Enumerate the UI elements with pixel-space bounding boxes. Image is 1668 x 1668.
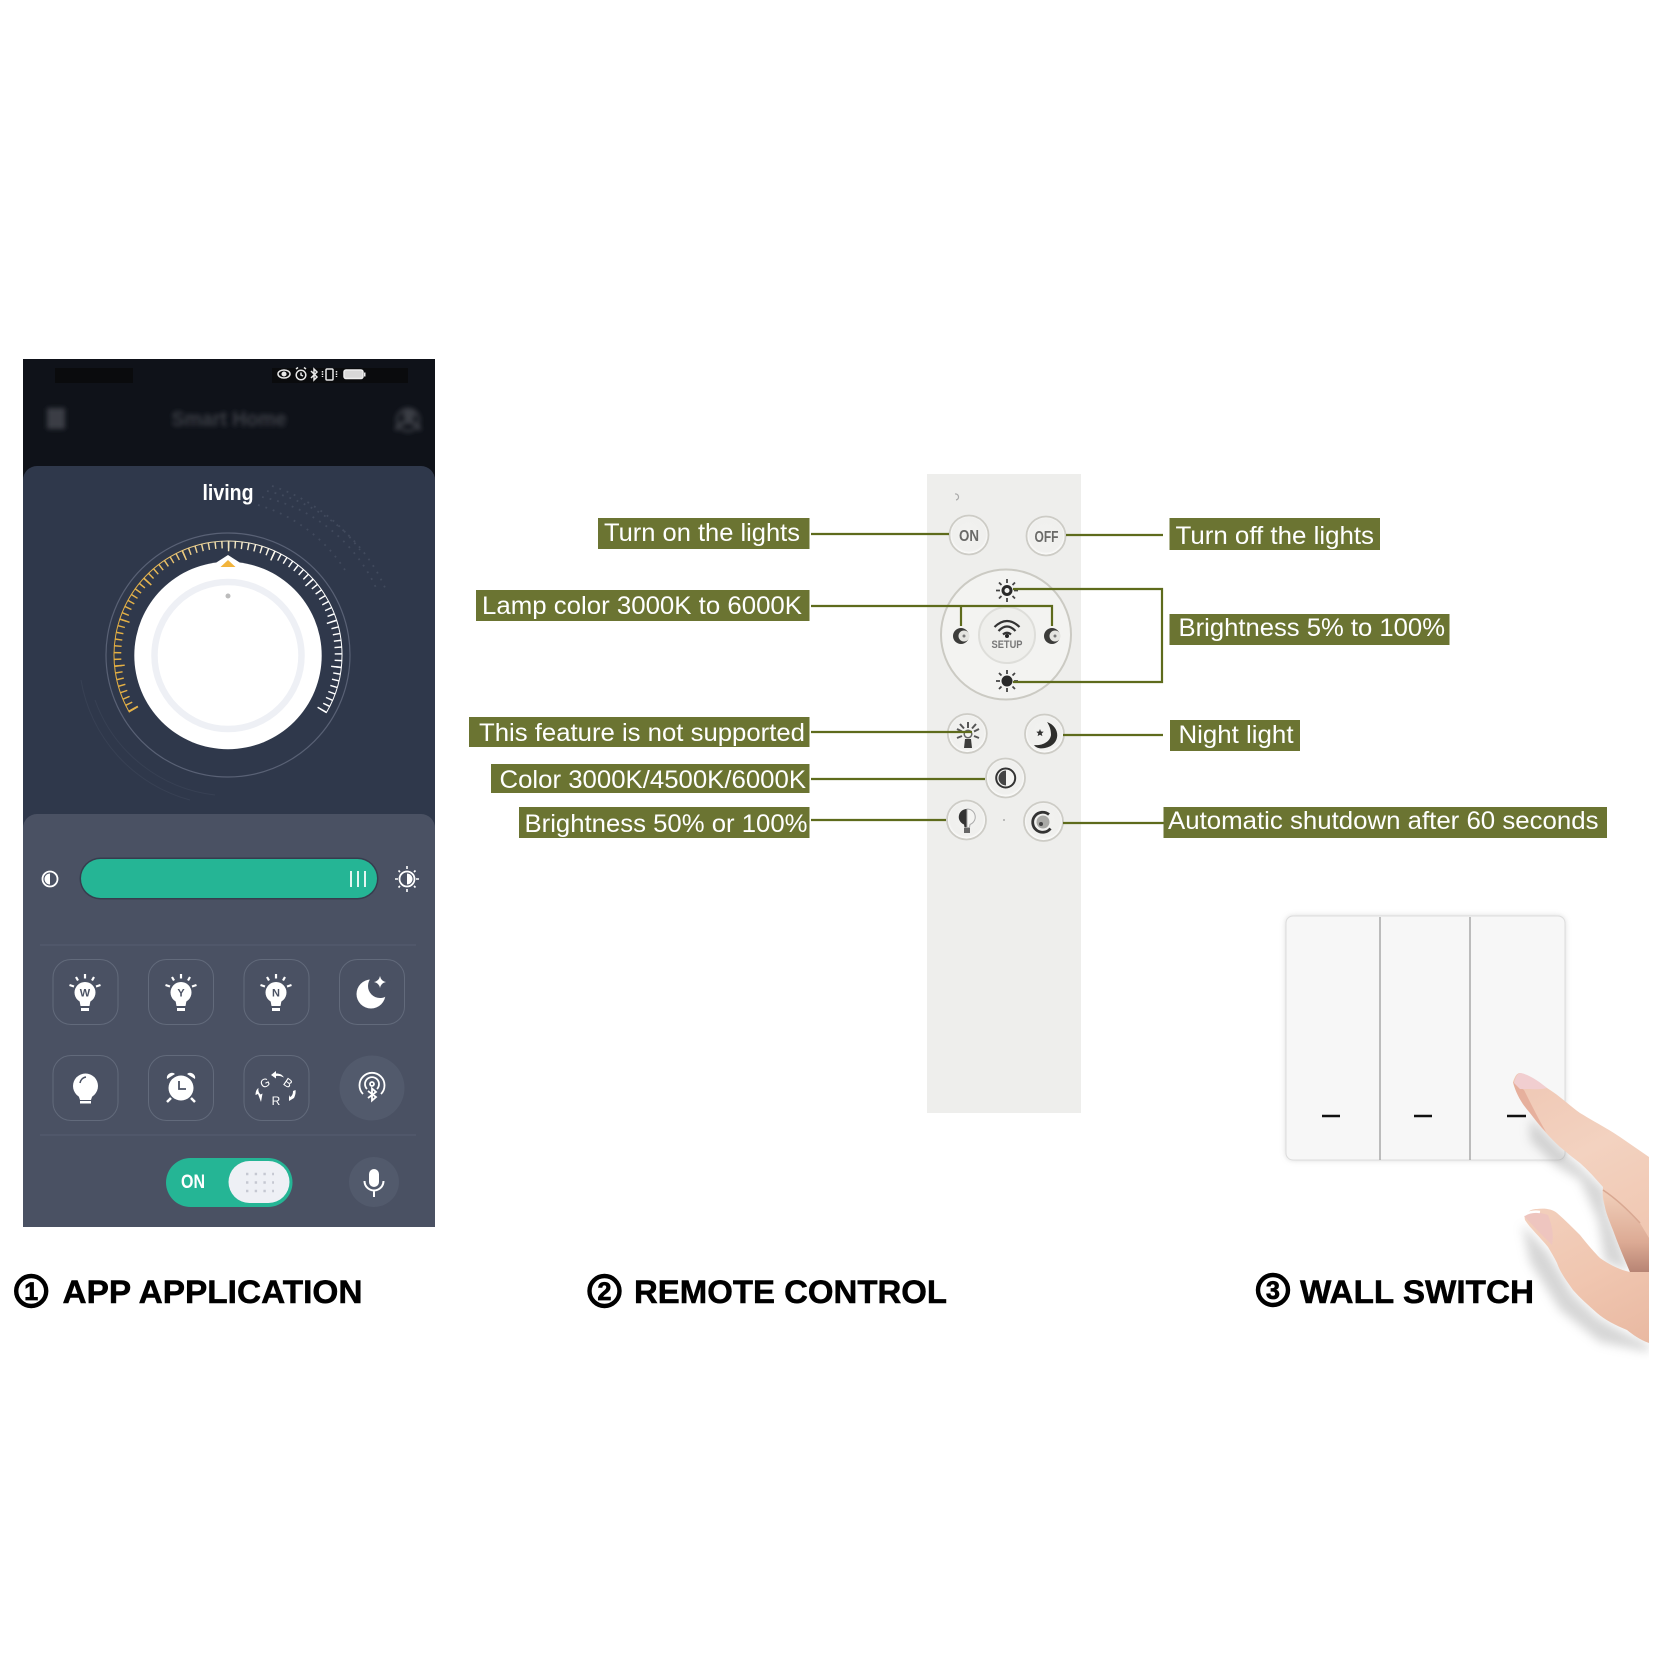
icon: brightness down [996,670,1018,692]
icon: brightness up [996,579,1018,602]
panel: remote control [927,474,1081,1113]
button: color mode [986,758,1025,798]
button: OFF: OFF [1034,529,1059,546]
heading: wall switch: WALL SWITCH [1300,1274,1534,1310]
label: brightness range: Brightness 5% to 100% [1178,614,1445,642]
button: bulb [948,714,987,753]
icon: bluetooth signal [340,1056,404,1120]
hand outline [1513,1073,1649,1343]
hand shadows [1522,1118,1649,1352]
dial [106,532,350,778]
blurred header: title and icons [47,408,420,431]
blurred header: title and icons: Smart Home [172,408,286,431]
button: ON [950,516,988,554]
status bar icons [55,368,408,383]
icon: microphone [349,1157,399,1207]
second finger fold [1605,1206,1649,1272]
finger nail [1514,1073,1547,1089]
panel: dial section [23,466,435,840]
icon: alarm clock [167,1073,195,1102]
label: brightness steps: Brightness 50% or 100% [524,810,808,838]
heading: app application: APP APPLICATION [62,1274,362,1310]
icon: RGB cycle [256,1071,296,1108]
label: color steps: Color 3000K/4500K/6000K [500,766,806,794]
panel: controls section [23,814,435,1227]
thumb nail [1524,1212,1553,1245]
icon: RGB cycle: G [258,1075,272,1091]
icon: yellow bulb Y: Y [177,988,185,1000]
icon: RGB cycle: R [272,1094,281,1108]
label: lamp color: Lamp color 3000K to 6000K [482,592,802,620]
icon: warmer [1044,628,1060,644]
label: night light: Night light [1178,721,1294,749]
button: OFF [1026,516,1066,556]
icon: warm bulb W: W [80,988,91,1000]
wall switch [1286,916,1565,1160]
decorative arcs [81,680,215,800]
icon: high brightness [395,866,419,892]
button: half brightness [947,800,986,840]
button: ON: ON [959,528,979,545]
decorative dots [258,486,386,590]
icon: RGB cycle: B [281,1075,295,1091]
hand pressing the switch [1513,1073,1649,1352]
icon: yellow bulb Y [166,974,196,1011]
label: turn off: Turn off the lights [1176,522,1374,550]
toggle: ON [166,1158,292,1207]
icon: neutral bulb N [260,974,292,1011]
button grid outlines [53,960,404,1120]
heading: remote control: REMOTE CONTROL [634,1274,947,1310]
icon: wifi setup: SETUP [992,639,1022,651]
slider [80,858,378,900]
heading: living: living [202,480,254,505]
heading: wall switch: 3 [1266,1277,1280,1305]
icon: warm bulb W [70,974,100,1011]
icon: plain bulb [73,1074,98,1104]
callout lines [811,534,1164,823]
icon: low brightness [42,872,58,886]
heading: remote control: 2 [598,1278,611,1306]
heading: app application: 1 [24,1278,38,1306]
icon: neutral bulb N: N [272,988,280,1000]
label: automatic shutdown: Automatic shutdown after 60 seconds [1168,807,1598,835]
toggle: ON: ON [181,1172,205,1193]
icon: cooler [953,628,970,644]
panel: app screen [23,359,435,1227]
label: not supported: This feature is not supported [479,719,805,747]
icon: moon and star [356,974,392,1008]
button ring: direction pad [941,570,1071,700]
button: moon [1025,714,1064,754]
label: turn on: Turn on the lights [604,519,800,547]
fingertip shading [1513,1082,1546,1132]
button: timer [1024,802,1063,841]
